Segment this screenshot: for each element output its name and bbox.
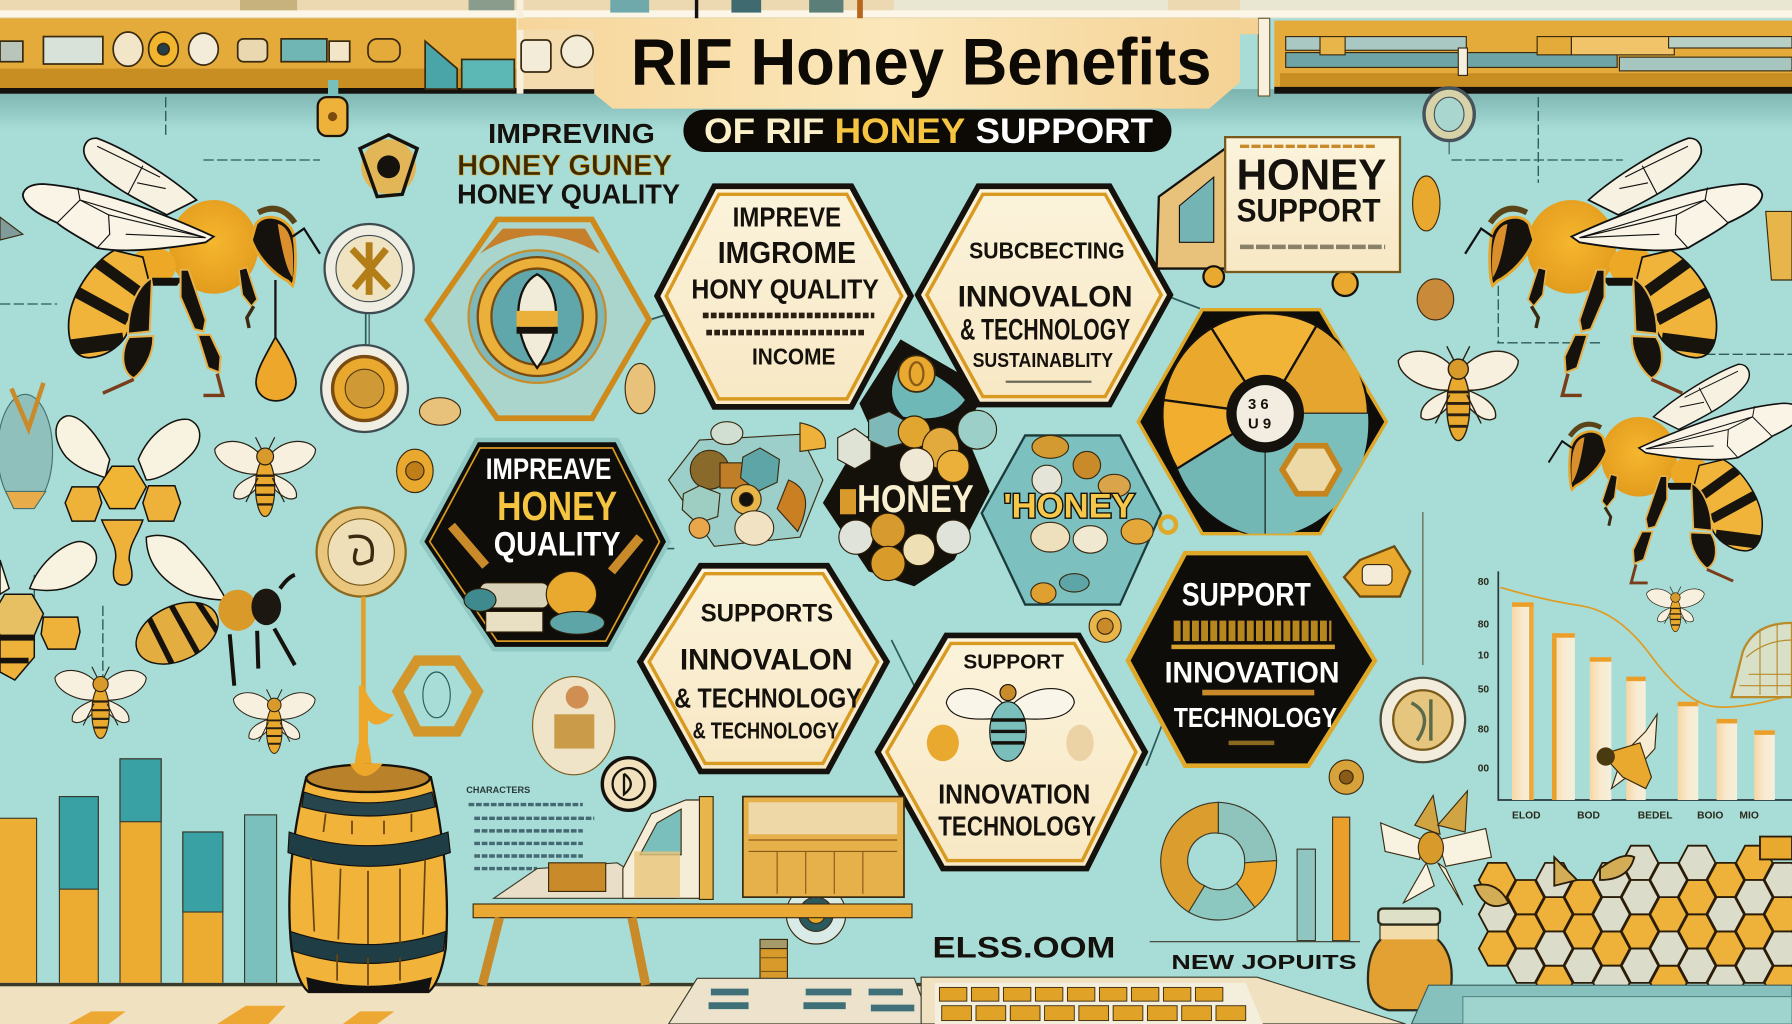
hexagon: innovation and technology: SUSTAINABLITY xyxy=(973,349,1113,372)
hexagon: pie chart xyxy=(1138,310,1386,537)
hexagon: improve income: IMGROME xyxy=(718,235,856,270)
hexagon: improve income xyxy=(657,186,911,407)
ring xyxy=(1160,517,1176,533)
small bees xyxy=(55,346,1704,753)
hexagon: supports innovalon: & TECHNOLOGY xyxy=(693,717,839,743)
papers on floor xyxy=(669,978,931,1024)
floor left xyxy=(0,983,928,1024)
wall shading band xyxy=(0,89,1792,130)
honeycomb xyxy=(1474,837,1792,1000)
crate xyxy=(743,797,904,897)
round badge icon xyxy=(602,758,655,810)
hexagon: teal honey collage xyxy=(982,435,1176,605)
oval picture icon xyxy=(533,677,615,775)
hexagon: support with bee: TECHNOLOGY xyxy=(938,810,1096,841)
axis labels: MIO xyxy=(1739,810,1759,821)
lower right bee xyxy=(1549,364,1792,583)
honeycomb bee at left edge xyxy=(0,542,96,680)
hexagon: central honey cells: HONEY xyxy=(857,478,974,521)
icon: striped bee xyxy=(927,685,1094,761)
title: RIF Honey Benefits xyxy=(631,26,1211,100)
axis labels: 00 xyxy=(1478,763,1489,774)
tray xyxy=(1411,985,1792,1024)
barrel xyxy=(288,763,450,992)
title plate xyxy=(518,18,1258,109)
hexagon: supports innovalon: & TECHNOLOGY xyxy=(674,682,862,713)
hexagon: support with bee: SUPPORT xyxy=(963,651,1064,674)
wire skep xyxy=(1731,623,1792,697)
honey support truck sign xyxy=(1157,137,1400,296)
hexagon: innovation and technology: SUBCBECTING xyxy=(969,237,1125,263)
hexagon: supports innovalon: INNOVALON xyxy=(680,644,853,677)
hexagon: black support innovation: INNOVATION xyxy=(1165,656,1339,689)
hexagon: supports innovalon: SUPPORTS xyxy=(701,600,833,628)
muted bee at left edge xyxy=(0,383,53,509)
axis labels: 80 xyxy=(1478,725,1489,736)
honey support truck sign: SUPPORT xyxy=(1237,193,1381,229)
footer text: new journals: NEW JOPUITS xyxy=(1171,951,1357,974)
text list: CHARACTERS xyxy=(466,785,530,795)
honey drop xyxy=(256,280,296,401)
donut chart xyxy=(1161,802,1277,920)
top right medallion xyxy=(1424,88,1474,154)
icons: upper left emblem xyxy=(360,135,417,197)
axis labels: BOIO xyxy=(1697,810,1723,821)
cluster: dark gap between upper hexagons xyxy=(859,339,979,434)
hexagon: black support innovation: TECHNOLOGY xyxy=(1174,702,1337,733)
axis labels: 80 xyxy=(1478,577,1489,588)
top shelf right xyxy=(1240,0,1792,96)
right bar chart xyxy=(1478,571,1792,821)
mini bar pair xyxy=(1150,817,1360,942)
honeycomb icon with wings xyxy=(56,416,200,585)
hanging tag xyxy=(318,80,347,136)
octagon ring icon xyxy=(398,661,478,731)
flower bee xyxy=(1381,791,1491,905)
honey dipper medallion xyxy=(317,507,406,789)
hexagon: black support innovation: SUPPORT xyxy=(1182,577,1311,613)
hexagon: support with bee: INNOVATION xyxy=(938,778,1090,809)
hexagon: innovation and technology xyxy=(918,186,1170,405)
medallion top xyxy=(325,224,414,349)
hexagon: pie chart: 3 6 xyxy=(1248,397,1269,413)
hexagon: pie chart: U 9 xyxy=(1248,417,1271,433)
hexagon: improve income: HONY QUALITY xyxy=(691,273,879,304)
pendant medallion xyxy=(1381,512,1465,762)
axis labels: 50 xyxy=(1478,685,1489,696)
hexagon: innovation and technology: & TECHNOLOGY xyxy=(960,313,1130,346)
table xyxy=(473,863,912,985)
medallion lower xyxy=(321,345,408,432)
hexagon: innovation and technology: INNOVALON xyxy=(958,280,1133,313)
small jar on floor xyxy=(760,939,787,992)
big bee right xyxy=(1465,138,1762,395)
hexagon: black improve honey quality: IMPREAVE xyxy=(486,453,611,486)
subtitle pill xyxy=(683,110,1171,152)
small coin icons xyxy=(786,610,1363,944)
axis labels xyxy=(1478,577,1759,821)
axis labels: ELOD xyxy=(1512,810,1541,821)
footer text: website: ELSS.OOM xyxy=(933,932,1115,965)
bee on chart xyxy=(1597,714,1657,789)
hexagon: teal honey collage: 'HONEY xyxy=(1003,488,1135,526)
heading: improving honey quality: HONEY QUALITY xyxy=(457,178,680,209)
heading: improving honey quality: HONEY GUNEY xyxy=(457,150,672,182)
top shelf left xyxy=(0,0,1258,94)
text list xyxy=(466,785,594,869)
hexagon: improve income: INCOME xyxy=(752,344,835,370)
hexagon: support with bee xyxy=(878,635,1145,869)
gold nut icon right xyxy=(1344,546,1410,597)
shelf items xyxy=(0,32,593,89)
hexagon: ornate xyxy=(427,219,649,418)
honey support truck sign: HONEY xyxy=(1237,152,1386,200)
hexagon: improve income: IMPREVE xyxy=(733,201,841,232)
heading: improving honey quality: IMPREVING xyxy=(488,118,655,149)
delivery truck xyxy=(623,797,713,899)
hexagon: black support innovation xyxy=(1128,553,1375,766)
hexagon: black improve honey quality xyxy=(422,440,669,649)
axis labels: BOD xyxy=(1577,810,1600,821)
subtitle: OF RIF HONEY SUPPORT xyxy=(704,111,1154,151)
medium bee xyxy=(126,535,295,686)
axis labels: 10 xyxy=(1478,650,1489,661)
cluster: left honey collage xyxy=(669,422,826,546)
hexagon: black improve honey quality: HONEY xyxy=(497,483,617,529)
big bee left xyxy=(23,138,320,395)
honey jar xyxy=(1368,909,1452,1010)
hexagon: central honey cells xyxy=(823,410,997,586)
keyboard xyxy=(921,977,1406,1024)
hexagon: black improve honey quality: QUALITY xyxy=(494,525,621,563)
left bar chart xyxy=(0,759,277,985)
axis labels: BEDEL xyxy=(1638,810,1673,821)
connector lines xyxy=(366,297,1200,766)
axis labels: 80 xyxy=(1478,619,1489,630)
hexagon: supports innovalon xyxy=(640,566,887,771)
small gold icons xyxy=(0,176,1792,493)
heading: improving honey quality xyxy=(457,118,680,209)
